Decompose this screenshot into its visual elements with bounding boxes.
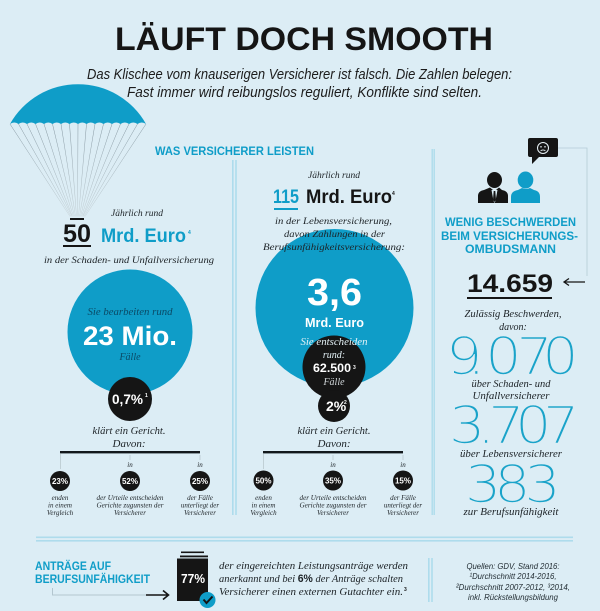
- item: 35 prozent: [300, 461, 367, 517]
- item: 23 prozent: 23%: [52, 477, 68, 486]
- item: 35 prozent: Versicherer: [317, 509, 349, 517]
- item: 15 prozent: [384, 461, 422, 517]
- item: 52 prozent: Gerichte zugunsten der: [96, 502, 164, 510]
- circle: 62.500 fälle: [300, 336, 368, 398]
- item: 15 prozent: der Fälle: [390, 494, 416, 502]
- icon: document with 77 percent: [177, 552, 216, 608]
- text: quellen: ²Durchschnitt 2007-2012, ³2014,: [456, 582, 570, 592]
- stat: 14.659: 14.659: [467, 270, 553, 298]
- heading: wenig beschwerden: BEIM VERSICHERUNGS-: [441, 229, 578, 243]
- circle: 23 mio fälle: Fälle: [118, 352, 141, 363]
- stat: 50 mrd euro: 50: [63, 220, 91, 248]
- panel: anträge auf berufsunfähigkeit: [35, 552, 570, 608]
- stat: 383: 383: [465, 455, 561, 514]
- item: 35 prozent: in: [330, 461, 336, 469]
- circle: 23 mio fälle: Sie bearbeiten rund: [88, 307, 174, 318]
- item: 50 prozent: Vergleich: [250, 509, 277, 517]
- circle: 2 prozent: 2: [344, 400, 347, 406]
- item: 50 prozent: [250, 470, 277, 517]
- icon: speech bubble: [528, 138, 558, 164]
- text: klärt ein gericht: klärt ein Gericht.: [298, 425, 370, 437]
- text: quellen: inkl. Rückstellungsbildung: [468, 592, 558, 602]
- stat: 115 mrd euro: 4: [392, 191, 395, 197]
- item: 52 prozent: 52%: [122, 477, 138, 486]
- text: in der lebensversicherung: in der Lebensversicherung,: [275, 217, 392, 227]
- text: in der lebensversicherung: [263, 217, 405, 253]
- stat: 115 mrd euro: Mrd. Euro: [306, 186, 392, 208]
- stat: 50 mrd euro: [63, 218, 191, 248]
- item: 23 prozent: in einem: [48, 502, 72, 510]
- panel: ombudsmann: [441, 138, 587, 518]
- arrow: to document: [52, 588, 168, 600]
- circle: 62.500 fälle: rund:: [323, 350, 345, 361]
- circle: 2 prozent: [318, 390, 350, 422]
- panel: schaden- und unfallversicherung: [44, 209, 219, 517]
- text: klärt ein gericht: [92, 425, 166, 450]
- item: 25 prozent: in: [197, 461, 203, 469]
- text: klärt ein gericht: Davon:: [316, 438, 350, 450]
- item: 15 prozent: Versicherer: [387, 509, 419, 517]
- title: LÄUFT DOCH SMOOTH: [115, 21, 493, 57]
- stat: 115 mrd euro: 115: [273, 186, 299, 208]
- circle: 0,7 prozent: 1: [145, 393, 148, 399]
- item: 35 prozent: Gerichte zugunsten der: [300, 502, 367, 510]
- icon: document with 77 percent: 77%: [181, 571, 205, 586]
- item: 25 prozent: Versicherer: [184, 509, 216, 517]
- item: 52 prozent: der Urteile entscheiden: [96, 494, 164, 502]
- text: in der schaden- und unfallversicherung: in der Schaden- und Unfallversicherung: [44, 255, 214, 266]
- heading: anträge auf berufsunfähigkeit: ANTRÄGE AUF: [35, 560, 111, 573]
- circle: 3,6 mrd euro: [256, 229, 414, 387]
- text: in der lebensversicherung: davon Zahlungen in der: [284, 230, 385, 240]
- text: zulässig beschwerden: Zulässig Beschwerden,: [464, 309, 562, 320]
- arrow: connector from speech bubble to 14.659: [558, 148, 587, 286]
- stat: 9.070: 9.070: [446, 327, 579, 386]
- bar: breakdown: [263, 451, 403, 469]
- item: 25 prozent: unterliegt der: [181, 502, 219, 510]
- text: anerkannt: anerkannt und bei 6% der Anträge schalten: [219, 573, 403, 585]
- heading: anträge auf berufsunfähigkeit: BERUFSUNFÄHIGKEIT: [35, 573, 150, 586]
- stat: 3.707: 3.707: [449, 396, 579, 455]
- stat: 383: zur Berufsunfähigkeit: [462, 507, 559, 518]
- text: anerkannt: 3: [404, 587, 407, 593]
- stat: 9.070: Unfallversicherer: [472, 391, 550, 402]
- item: 25 prozent: 25%: [192, 477, 208, 486]
- heading: wenig beschwerden: OMBUDSMANN: [465, 242, 556, 256]
- text: klärt ein gericht: klärt ein Gericht.: [92, 425, 166, 437]
- text: klärt ein gericht: [298, 425, 370, 450]
- item: 50 prozent: 50%: [255, 476, 272, 486]
- circle: 62.500 fälle: Fälle: [322, 377, 345, 388]
- text: anerkannt: [219, 560, 408, 598]
- circle: 3,6 mrd euro: 3,6: [307, 272, 362, 314]
- item: 52 prozent: in: [127, 461, 133, 469]
- stat: 50 mrd euro: Mrd. Euro: [101, 225, 186, 247]
- text: zulässig beschwerden: [464, 309, 562, 333]
- text: jährlich rund: Jährlich rund: [308, 171, 360, 181]
- circle: 23 mio fälle: [68, 270, 192, 394]
- text: quellen: Quellen: GDV, Stand 2016:: [466, 561, 560, 571]
- item: 52 prozent: Versicherer: [114, 509, 146, 517]
- circle: 23 mio fälle: 23 Mio.: [83, 321, 177, 351]
- item: 23 prozent: [47, 471, 74, 517]
- subtitle: Fast immer wird reibungslos reguliert, Konflikte sind selten.: [127, 85, 482, 101]
- circle: 62.500 fälle: Sie entscheiden: [300, 337, 368, 348]
- stat: 115 mrd euro: [273, 186, 395, 210]
- stat: 50 mrd euro: 4: [188, 230, 191, 236]
- item: 25 prozent: [181, 461, 219, 517]
- heading: anträge auf berufsunfähigkeit: [35, 560, 150, 586]
- heading: wenig beschwerden: [441, 215, 578, 256]
- item: 15 prozent: in: [400, 461, 406, 469]
- text: quellen: ¹Durchschnitt 2014-2016,: [470, 571, 556, 581]
- text: klärt ein gericht: Davon:: [112, 438, 146, 450]
- item: 15 prozent: 15%: [395, 476, 411, 486]
- text: anerkannt: der eingereichten Leistungsanträge werden: [219, 560, 408, 572]
- item: 35 prozent: der Urteile entscheiden: [300, 494, 367, 502]
- stat: 3.707: über Lebensversicherer: [460, 449, 562, 460]
- item: 23 prozent: Vergleich: [47, 509, 74, 517]
- item: 25 prozent: der Fälle: [187, 494, 213, 502]
- circle: 2 prozent: 2%: [326, 398, 347, 414]
- item: 52 prozent: [96, 461, 164, 517]
- icon: parachute: [10, 84, 146, 216]
- icon: two people: [478, 172, 540, 203]
- text: jährlich rund: Jährlich rund: [111, 209, 163, 219]
- circle: 3,6 mrd euro: Mrd. Euro: [305, 315, 364, 330]
- heading: wenig beschwerden: WENIG BESCHWERDEN: [445, 215, 576, 229]
- text: in der lebensversicherung: Berufsunfähigkeitsversicherung:: [263, 242, 405, 253]
- heading: was versicherer leisten: WAS VERSICHERER LEISTEN: [155, 144, 314, 158]
- text: anerkannt: Versicherer einen externen Gutachter ein.: [219, 586, 403, 598]
- text: zulässig beschwerden: davon:: [499, 322, 527, 333]
- item: 50 prozent: in einem: [252, 502, 275, 510]
- circle: 0,7 prozent: 0,7%: [112, 391, 144, 407]
- bar: breakdown: [60, 451, 200, 469]
- item: 15 prozent: unterliegt der: [384, 502, 422, 510]
- panel: lebensversicherung: [250, 171, 422, 517]
- stat: 9.070: über Schaden- und: [472, 379, 552, 390]
- circle: 62.500 fälle: 3: [353, 365, 356, 371]
- item: 35 prozent: 35%: [325, 476, 341, 486]
- item: 23 prozent: enden: [52, 494, 69, 502]
- text: quellen: [456, 561, 570, 602]
- subtitle: [87, 67, 512, 101]
- item: 50 prozent: enden: [255, 494, 272, 502]
- circle: 0,7 prozent: [108, 377, 152, 421]
- subtitle: Das Klischee vom knauserigen Versicherer ist falsch. Die Zahlen belegen:: [87, 67, 512, 83]
- circle: 62.500 fälle: 62.500: [313, 363, 351, 375]
